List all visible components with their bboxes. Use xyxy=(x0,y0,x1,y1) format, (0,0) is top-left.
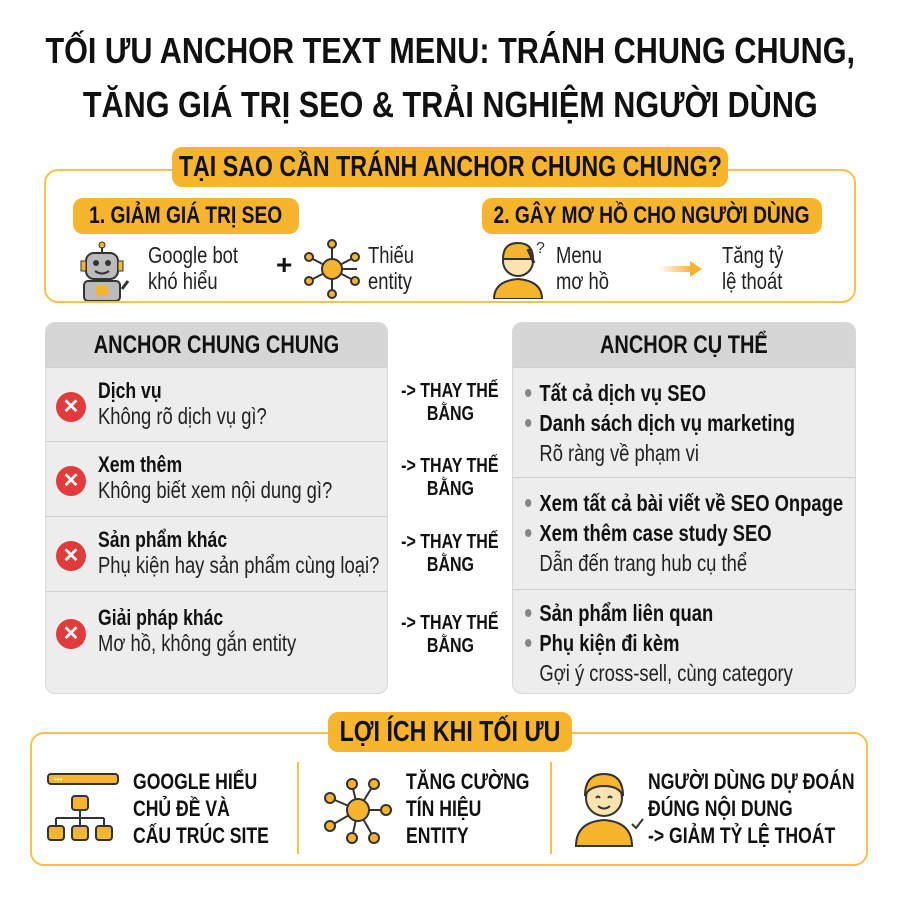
text: menu mo ho: mơ hồ xyxy=(556,268,609,294)
replace label 2 xyxy=(401,454,499,500)
icon: sitemap: ••• xyxy=(54,775,63,784)
group 1: Tất cả dịch vụ SEO xyxy=(539,380,706,406)
group 1: Danh sách dịch vụ marketing xyxy=(539,410,795,436)
text: thieu entity: entity xyxy=(368,268,412,294)
replace label 3: -> THAY THẾ xyxy=(401,531,499,553)
row 4: Giải pháp khác xyxy=(98,605,223,630)
replace label 4: BẰNG xyxy=(426,635,474,657)
sub heading 2: 2. GÂY MƠ HỒ CHO NGƯỜI DÙNG xyxy=(494,202,810,229)
row 3: ✕ xyxy=(63,545,79,567)
row 1: ✕ xyxy=(63,396,79,418)
text: benefit 2: ENTITY xyxy=(406,823,469,848)
panel: why avoid xyxy=(44,169,856,303)
replace label 3 xyxy=(401,530,499,576)
group 3: Gợi ý cross-sell, cùng category xyxy=(539,660,793,686)
text: benefit 1 xyxy=(133,769,269,848)
text: tang ty le thoat: Tăng tỷ xyxy=(722,242,783,268)
text: benefit 2 xyxy=(406,769,529,848)
replace label 4: -> THAY THẾ xyxy=(401,612,499,634)
row 2: ✕ xyxy=(63,470,79,492)
replace label 1: -> THAY THẾ xyxy=(401,380,499,402)
text: benefit 3: NGƯỜI DÙNG DỰ ĐOÁN xyxy=(648,769,855,794)
row 4: ✕ xyxy=(63,623,79,645)
text: menu mo ho: Menu xyxy=(556,242,602,268)
replace label 1: BẰNG xyxy=(426,403,474,425)
row 2 xyxy=(46,441,387,516)
group 3: Phụ kiện đi kèm xyxy=(539,630,679,656)
row 1 xyxy=(46,367,387,441)
arrow xyxy=(660,261,702,277)
text: benefit 1: CHỦ ĐỀ VÀ xyxy=(133,796,230,821)
text: benefit 3: ĐÚNG NỘI DUNG xyxy=(648,796,793,821)
text: google bot xyxy=(148,242,238,294)
row 4: Mơ hồ, không gắn entity xyxy=(98,630,296,656)
text: tang ty le thoat: lệ thoát xyxy=(722,268,782,294)
row 1: Dịch vụ xyxy=(98,378,162,403)
panel: benefits xyxy=(30,732,868,866)
text: benefit 3 xyxy=(648,769,855,848)
text: tang ty le thoat xyxy=(722,242,784,294)
icon: entity xyxy=(304,239,360,299)
sub heading 1: 1. GIẢM GIÁ TRỊ SEO xyxy=(89,202,283,229)
group 2: Xem tất cả bài viết về SEO Onpage xyxy=(539,490,843,516)
title: TĂNG GIÁ TRỊ SEO & TRẢI NGHIỆM NGƯỜI DÙNG xyxy=(83,84,817,125)
row 2: Không biết xem nội dung gì? xyxy=(98,477,332,503)
replace label 1 xyxy=(401,379,499,425)
text: thieu entity: Thiếu xyxy=(368,242,414,268)
text: benefit 2: TÍN HIỆU xyxy=(406,796,481,821)
text: benefit 2: TĂNG CƯỜNG xyxy=(406,769,529,794)
panel: specific anchors: ANCHOR CỤ THỂ xyxy=(600,330,768,358)
text: thieu entity xyxy=(368,242,414,294)
replace label 3: BẰNG xyxy=(426,554,474,576)
replace label 2: -> THAY THẾ xyxy=(401,455,499,477)
sub heading 2 xyxy=(482,198,822,234)
title xyxy=(45,30,855,125)
replace label 4 xyxy=(401,611,499,657)
row 3: Sản phẩm khác xyxy=(98,527,227,552)
group 3: Sản phẩm liên quan xyxy=(539,600,713,626)
row 4 xyxy=(46,591,387,695)
group 2: Dẫn đến trang hub cụ thể xyxy=(539,550,747,576)
panel: generic anchors xyxy=(45,322,388,694)
row 2: Xem thêm xyxy=(98,452,182,477)
icon: robot xyxy=(80,242,130,301)
text: benefit 3: -> GIẢM TỶ LỆ THOÁT xyxy=(648,823,835,848)
replace label 2: BẰNG xyxy=(426,478,474,500)
sub heading 1 xyxy=(73,198,299,234)
icon: confused user: ? xyxy=(536,240,545,257)
text: benefit 1: CẤU TRÚC SITE xyxy=(133,823,269,848)
icon: happy user xyxy=(575,773,644,847)
title: TỐI ƯU ANCHOR TEXT MENU: TRÁNH CHUNG CHUNG, xyxy=(45,30,855,71)
heading: benefits: LỢI ÍCH KHI TỐI ƯU xyxy=(340,716,560,748)
text: google bot: Google bot xyxy=(148,242,238,268)
group 1: Rõ ràng về phạm vi xyxy=(539,440,699,466)
icon: entity network xyxy=(324,778,392,844)
text: google bot: khó hiểu xyxy=(148,268,218,294)
group 3 xyxy=(513,589,855,695)
icon: sitemap xyxy=(47,773,119,841)
text: menu mo ho xyxy=(556,242,609,294)
heading: why: TẠI SAO CẦN TRÁNH ANCHOR CHUNG CHUNG? xyxy=(178,150,722,182)
group 2 xyxy=(513,477,855,589)
icon: plus: + xyxy=(276,249,292,280)
panel: specific anchors xyxy=(512,322,856,694)
group 1 xyxy=(513,367,855,477)
text: benefit 1: GOOGLE HIỂU xyxy=(133,769,257,794)
row 3: Phụ kiện hay sản phẩm cùng loại? xyxy=(98,552,379,578)
icon: confused user xyxy=(493,240,545,299)
row 3 xyxy=(46,516,387,591)
row 1: Không rõ dịch vụ gì? xyxy=(98,403,267,429)
panel: generic anchors: ANCHOR CHUNG CHUNG xyxy=(94,330,339,358)
group 2: Xem thêm case study SEO xyxy=(539,520,772,546)
